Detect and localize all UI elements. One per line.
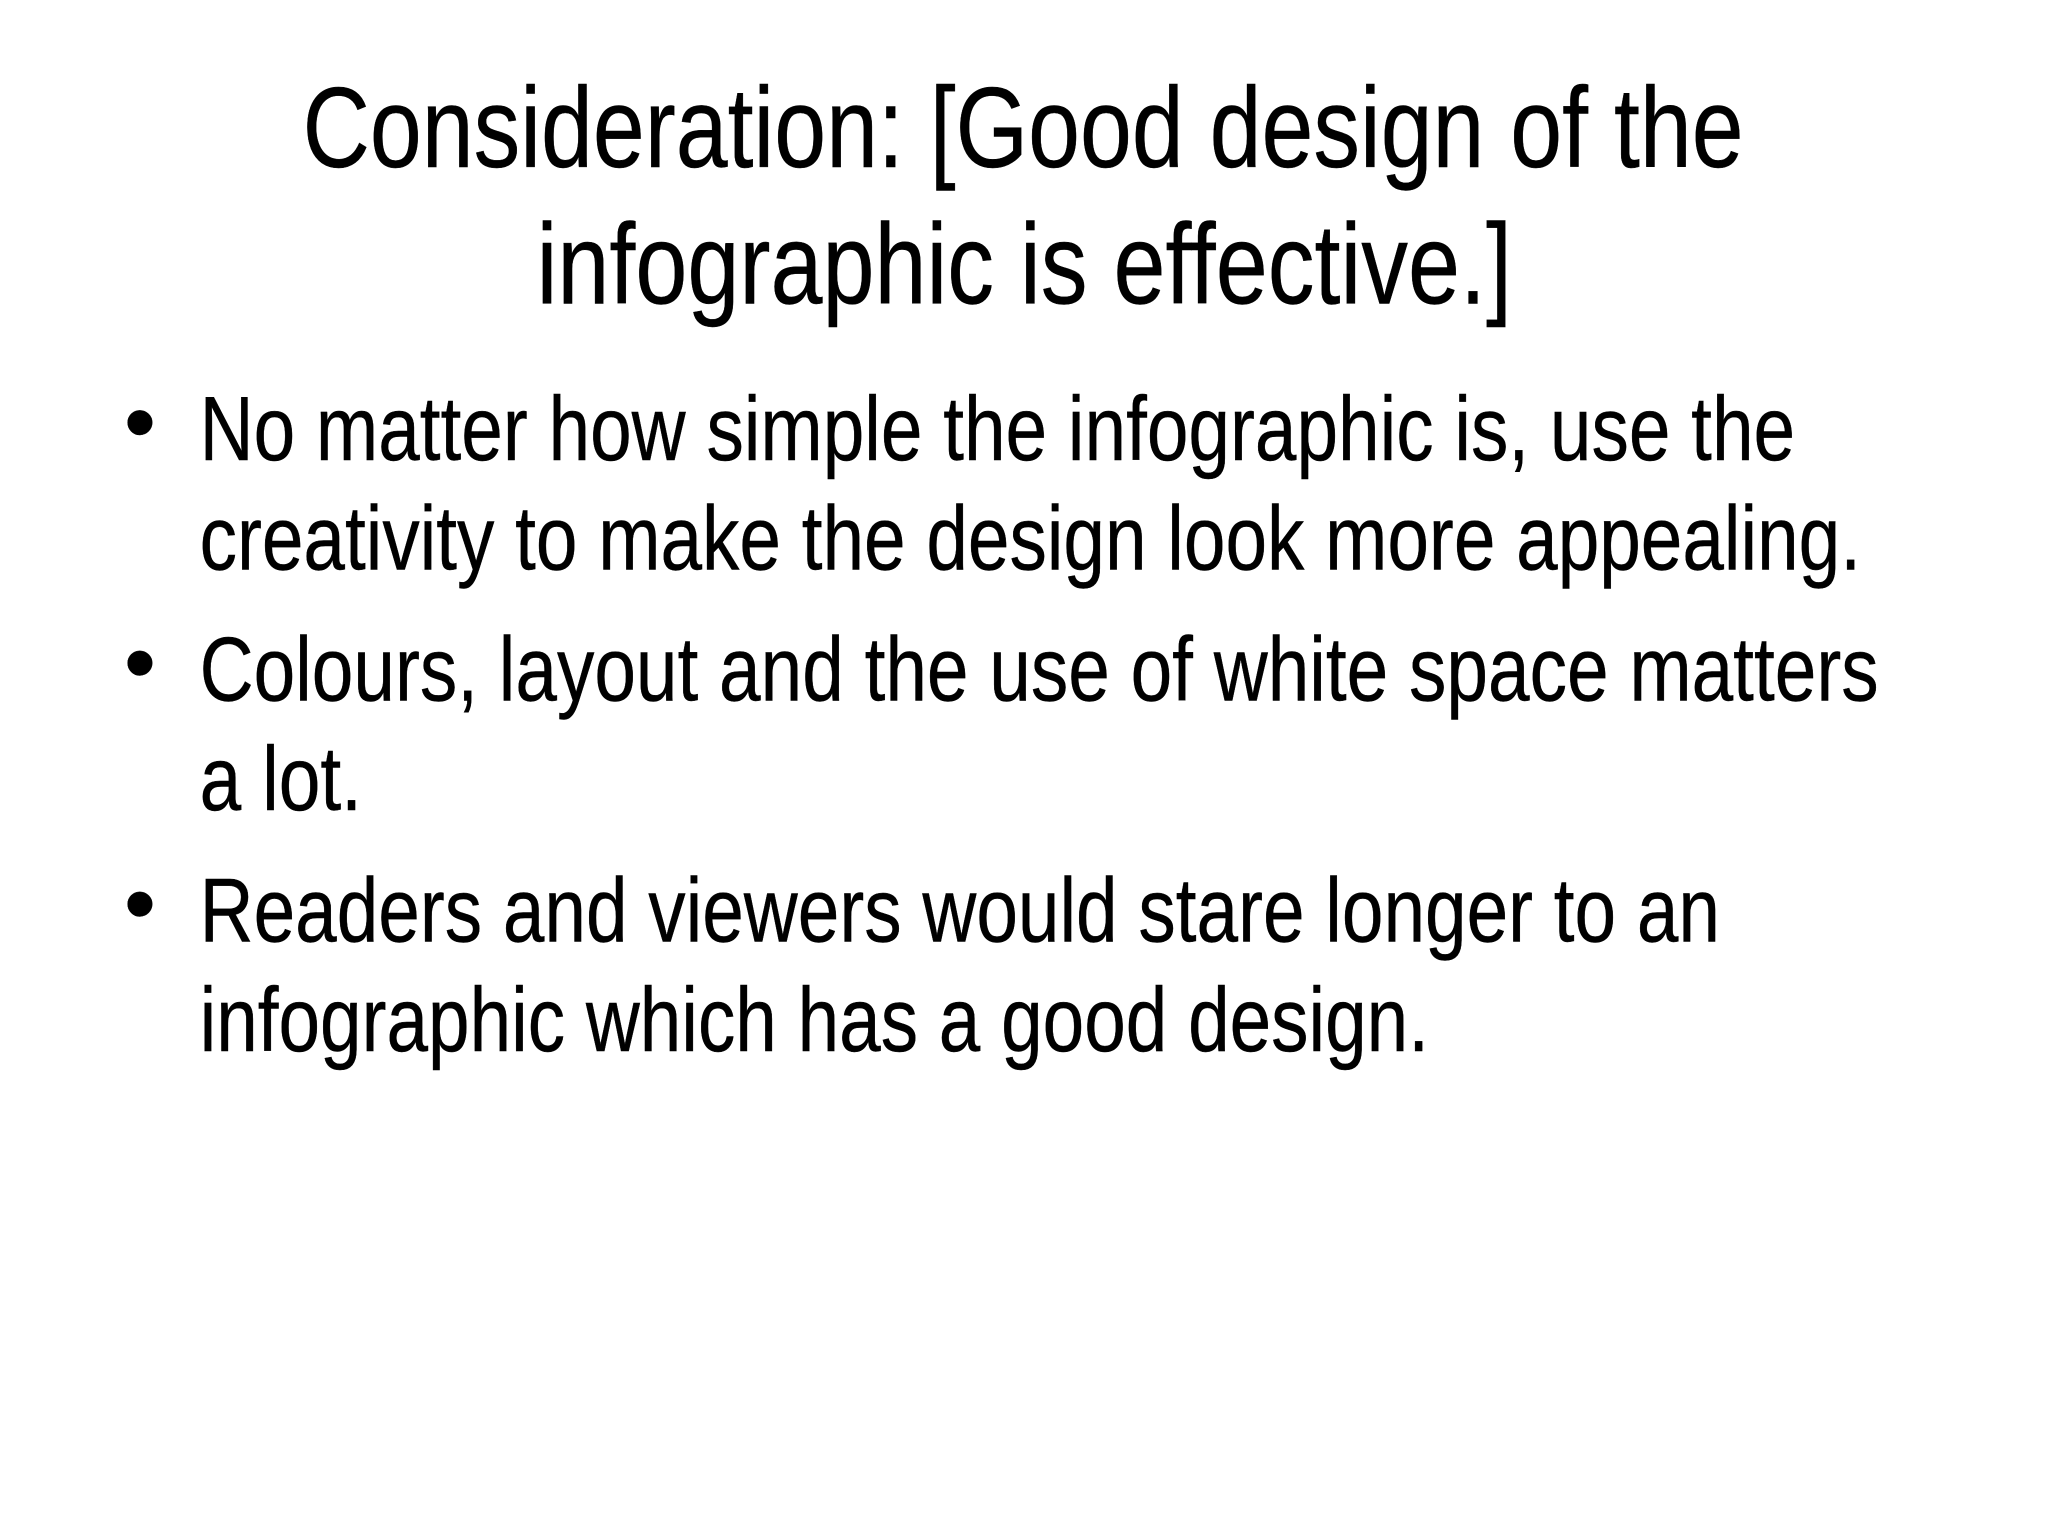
bullet point: readers and viewers: Readers and viewers would stare longer to an — [200, 860, 1720, 962]
bullet list — [124, 372, 1879, 1071]
title — [303, 65, 1744, 328]
bullet point: colours and layout: a lot. — [200, 729, 362, 830]
bullet point: appealing design: • — [124, 372, 156, 473]
title: infographic is effective.] — [537, 202, 1512, 328]
bullet point: colours and layout — [124, 612, 1879, 830]
title: Consideration: [Good design of the — [303, 65, 1744, 192]
bullet point: colours and layout: • — [124, 612, 156, 714]
bullet point: appealing design — [124, 372, 1861, 590]
bullet point: readers and viewers — [124, 854, 1720, 1071]
bullet point: readers and viewers: • — [124, 854, 156, 954]
bullet point: readers and viewers: infographic which has a good design. — [200, 970, 1429, 1071]
